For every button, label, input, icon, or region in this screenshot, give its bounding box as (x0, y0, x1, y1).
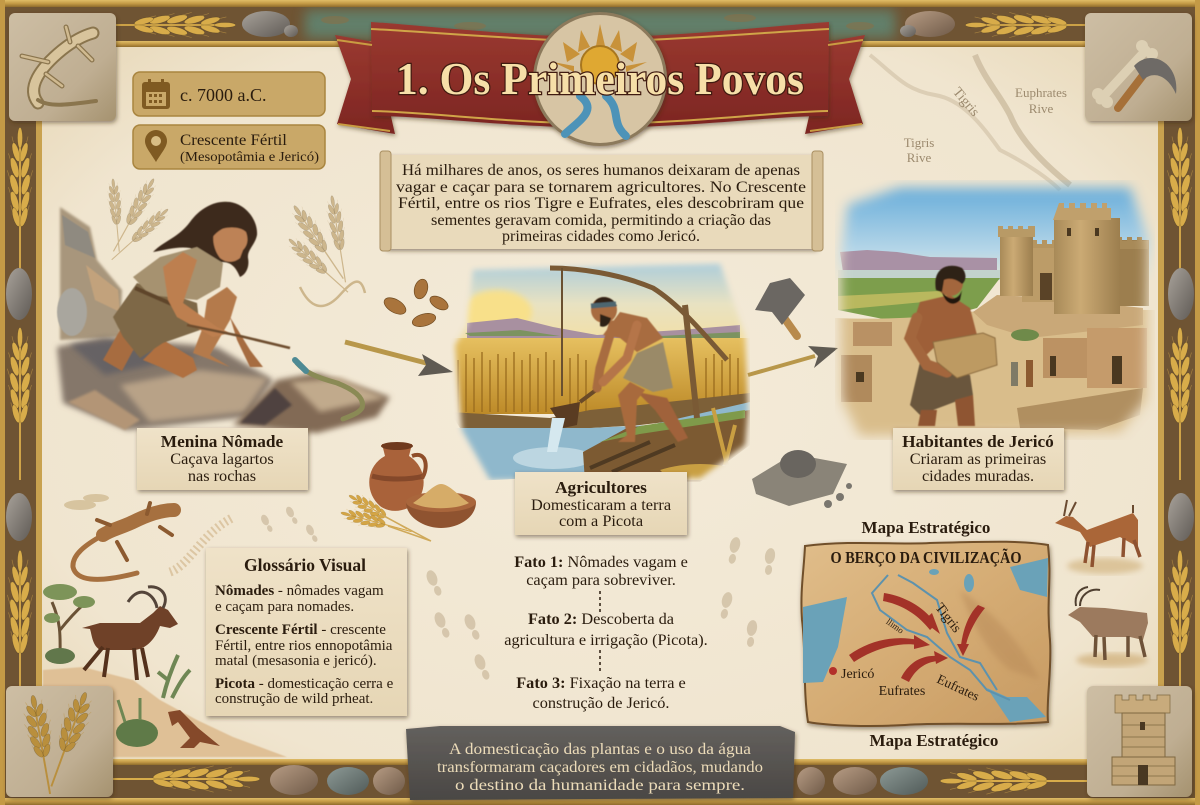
card: Habitantes de Jerico: cidades muradas. (922, 466, 1034, 485)
intro scroll (380, 151, 823, 251)
glossary panel: matal (mesasonia e jericó). (215, 653, 377, 669)
arrow: girl to farmer (345, 342, 453, 376)
tree (43, 584, 95, 664)
intro scroll: primeiras cidades como Jericó. (502, 226, 700, 245)
banner title: 1. Os Primeiros Povos (396, 54, 804, 104)
corner stone: wheat (6, 686, 113, 797)
fact 3: construção de Jericó. (533, 693, 669, 712)
medallion (533, 12, 667, 146)
map: cradle of civilization (801, 542, 1050, 726)
date pill: c. 7000 a.C. (180, 85, 266, 105)
intro scroll: sementes geravam comida, permitindo a criação das (431, 210, 771, 229)
card: Agricultores: com a Picota (559, 511, 643, 530)
illustration: farmer with picota (450, 260, 750, 482)
sketch map with rivers, top right: Rive (1029, 101, 1054, 116)
girl (103, 202, 290, 378)
intro scroll: vagar e caçar para se tornarem agricultores. No Crescente (396, 177, 806, 196)
map: cradle of civilization: O BERÇO DA CIVILIZAÇÃO (830, 548, 1022, 567)
closing stone plaque (406, 726, 795, 800)
location pill: Crescente Fértil (180, 132, 287, 149)
sketch map with rivers, top right (870, 55, 1070, 190)
card: Menina Nomade: Caçava lagartos (170, 449, 274, 468)
shrubs (158, 655, 190, 698)
closing stone plaque: A domesticação das plantas e o uso da água (449, 741, 751, 758)
illustration: nomad girl (57, 175, 390, 433)
intro scroll: Fértil, entre os rios Tigre e Eufrates, eles descobriram que (398, 193, 804, 212)
footprints (259, 505, 776, 682)
corner stone: tools (1085, 13, 1192, 121)
tunic top (133, 247, 223, 300)
closing stone plaque: o destino da humanidade para sempre. (455, 777, 745, 794)
map caption: Mapa Estratégico (870, 731, 998, 750)
fact 2 (504, 609, 708, 649)
sand traces (170, 518, 232, 572)
illustration: Jericho builder and walled city (835, 180, 1155, 440)
fact 2: Fato 2: Descoberta da (528, 609, 674, 628)
lizard on rock (297, 363, 363, 419)
tunic skirt (113, 283, 200, 358)
glossary panel: Nômades - nômades vagam (215, 583, 384, 599)
fact 3: Fato 3: Fixação na terra e (516, 673, 686, 692)
map: cradle of civilization: Eufrates (935, 671, 982, 704)
map: cradle of civilization: llimo (884, 616, 906, 636)
right rock (233, 373, 390, 433)
icon: map pin (145, 130, 167, 162)
card: Agricultores: Agricultores (555, 478, 647, 497)
map: cradle of civilization: Tigris (932, 601, 964, 636)
lizard (73, 503, 174, 579)
map heading: Mapa Estratégico (862, 518, 990, 537)
ibex (82, 587, 178, 680)
card: Habitantes de Jerico (893, 428, 1064, 490)
fact 1: Fato 1: Nômades vagam e (514, 552, 688, 571)
builder (910, 266, 997, 426)
date pill (133, 72, 325, 116)
card: Agricultores: Domesticaram a terra (531, 495, 671, 514)
sketch map with rivers, top right: Tigris (904, 135, 934, 150)
card: Habitantes de Jerico: Criaram as primeiras (910, 449, 1046, 468)
fact 1 (514, 552, 688, 589)
card: Menina Nomade (137, 428, 308, 490)
arm (163, 252, 230, 337)
corner stone: lizard (9, 13, 116, 121)
glossary panel: Crescente Fértil - crescente (215, 622, 386, 638)
sketch map with rivers, top right: Rive (907, 150, 932, 165)
rock ledge (57, 337, 273, 430)
ground and hillside (43, 667, 287, 757)
left boulders (60, 207, 122, 340)
lower-left wildlife (43, 494, 287, 757)
icon: calendar (142, 79, 170, 109)
card: Menina Nomade: nas rochas (188, 466, 256, 485)
grinding stone (752, 450, 852, 508)
farmer (591, 297, 688, 442)
wheat sprigs (106, 175, 365, 306)
title banner (335, 12, 865, 146)
facts timeline (504, 552, 708, 712)
closing stone plaque: transformaram caçadores em cidadãos, mudando (437, 759, 763, 776)
hair behind (153, 202, 257, 277)
card: Agricultores (515, 472, 687, 535)
sketch map with rivers, top right: Tigris (949, 85, 982, 120)
arrow: farmer to city (748, 346, 838, 375)
fact 3 (516, 673, 686, 712)
glossary panel (206, 548, 407, 716)
glossary panel: Fértil, entre rios ennopotâmia (215, 638, 393, 654)
clay pot, bowl and wheat (339, 442, 476, 541)
goat top right (1055, 500, 1143, 574)
card: Habitantes de Jerico: Habitantes de Jericó (902, 432, 1054, 451)
location pill: (Mesopotâmia e Jericó) (180, 150, 319, 165)
face (213, 228, 247, 262)
fact 1: caçam para sobreviver. (526, 570, 676, 589)
glossary panel: e caçam para nomades. (215, 599, 354, 615)
glossary panel: Glossário Visual (244, 555, 366, 575)
corner stone: tower (1087, 686, 1192, 797)
icon: stone hammer (755, 278, 805, 336)
glossary panel: Picota - domesticação cerra e (215, 676, 394, 692)
fact 2: agricultura e irrigação (Picota). (504, 630, 708, 649)
intro scroll: Há milhares de anos, os seres humanos deixaram de apenas (402, 160, 800, 179)
map: cradle of civilization: Eufrates (879, 684, 925, 699)
goat lower right (1068, 587, 1148, 667)
location pill (133, 125, 325, 169)
map: cradle of civilization: Jericó (841, 667, 874, 682)
card: Menina Nomade: Menina Nômade (161, 432, 284, 451)
sketch map with rivers, top right: Euphrates (1015, 85, 1067, 100)
glossary panel: construção de wild prheat. (215, 691, 373, 707)
seeds (381, 278, 450, 329)
weasel (168, 710, 220, 748)
